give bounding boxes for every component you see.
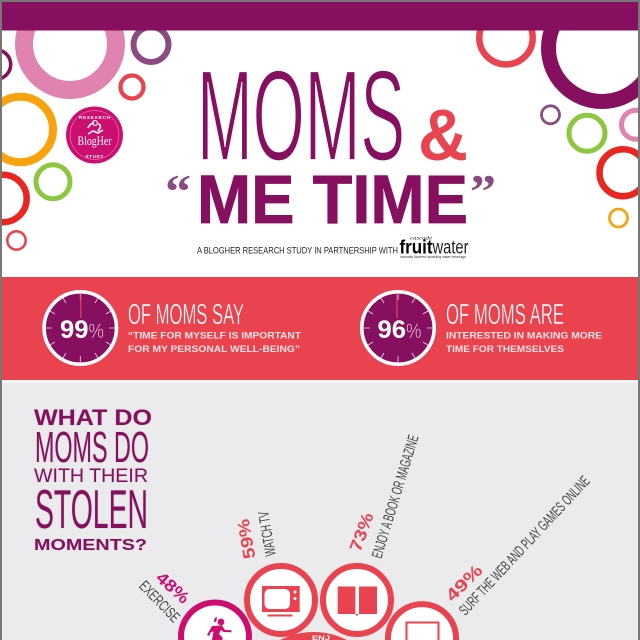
logo: fruitwater: fruit	[400, 238, 433, 258]
label: 49% surf the web and play games online	[442, 473, 594, 619]
stat text: of moms are: INTERESTED IN MAKING MORE	[446, 330, 603, 342]
stat text: of moms say	[128, 299, 301, 355]
activity circle: enjoy	[280, 632, 347, 640]
label: 48% exercise: 48%	[152, 568, 193, 608]
title: MOMS: MOMS	[197, 44, 405, 188]
stat text: of moms say: “TIME FOR MYSELF IS IMPORTANT	[128, 330, 301, 342]
badge: BlogHer research study: RESEARCH	[79, 115, 111, 120]
logo: fruitwater: water	[432, 238, 469, 258]
icon: runner	[207, 617, 232, 640]
title: closing quote: ”	[470, 166, 496, 218]
heading: what do moms do with their stolen moments: MOMS DO	[35, 424, 149, 472]
stat text: of moms say: FOR MY PERSONAL WELL-BEING”	[128, 344, 300, 355]
badge: BlogHer research study	[66, 106, 123, 164]
label: 73% enjoy a book or magazine: 73%	[346, 510, 378, 554]
heading: what do moms do with their stolen moments: STOLEN	[35, 478, 148, 540]
activity circle: surf the web	[385, 601, 459, 640]
panel: key statistics band	[0, 277, 640, 380]
gauge: 99%: %	[88, 320, 104, 343]
icon: monitor	[406, 622, 438, 640]
heading: what do moms do with their stolen moments: WHAT DO	[34, 405, 152, 430]
icon: open book	[338, 586, 377, 616]
label: 49% surf the web and play games online: 49%	[442, 561, 486, 605]
logo: fruitwater: cascade	[410, 236, 433, 242]
label: 59% watch tv: 59%	[234, 518, 259, 560]
panel: stolen moments background	[0, 380, 640, 640]
title: opening quote: “	[165, 166, 191, 218]
gauge: 96%	[362, 292, 434, 364]
label: 73% enjoy a book or magazine: ENJOY A BOOK OR MAGAZINE	[369, 433, 423, 560]
activity circle: read	[323, 566, 391, 634]
logo: fruitwater: naturally flavored sparkling water beverage	[400, 255, 466, 259]
heading: what do moms do with their stolen moments: MOMENTS?	[34, 537, 147, 554]
decorative rings: left cluster	[0, 0, 168, 250]
icon: television	[262, 586, 300, 616]
stat text: of moms say: OF MOMS SAY	[128, 299, 244, 331]
stat text: of moms are	[446, 299, 603, 355]
activity circle: watch tv	[247, 566, 315, 634]
label: 48% exercise	[135, 568, 193, 626]
label: 73% enjoy a book or magazine	[346, 433, 423, 560]
logo: fruitwater	[400, 236, 469, 259]
gauge: 96%: %	[406, 320, 422, 343]
label: 59% watch tv	[234, 510, 280, 560]
gauge: 96%: 96	[378, 316, 406, 344]
decorative rings: right cluster	[479, 0, 640, 227]
subtitle: A BLOGHER RESEARCH STUDY IN PARTNERSHIP WITH	[197, 246, 398, 256]
badge: BlogHer research study: BlogHer	[78, 134, 112, 148]
top banner	[0, 0, 640, 30]
gauge: 99%: 99	[60, 316, 88, 344]
heading: what do moms do with their stolen moments	[34, 405, 152, 554]
badge: BlogHer research study: STUDY	[86, 154, 104, 159]
activity circle: exercise	[178, 599, 252, 640]
label: 59% watch tv: WATCH TV	[255, 510, 280, 557]
title: ampersand: &	[418, 96, 468, 176]
stat text: of moms are: TIME FOR THEMSELVES	[446, 344, 565, 355]
title: ME TIME: ME TIME	[197, 161, 468, 238]
gauge: 99%	[44, 292, 116, 364]
heading: what do moms do with their stolen moments: WITH THEIR	[34, 466, 148, 487]
